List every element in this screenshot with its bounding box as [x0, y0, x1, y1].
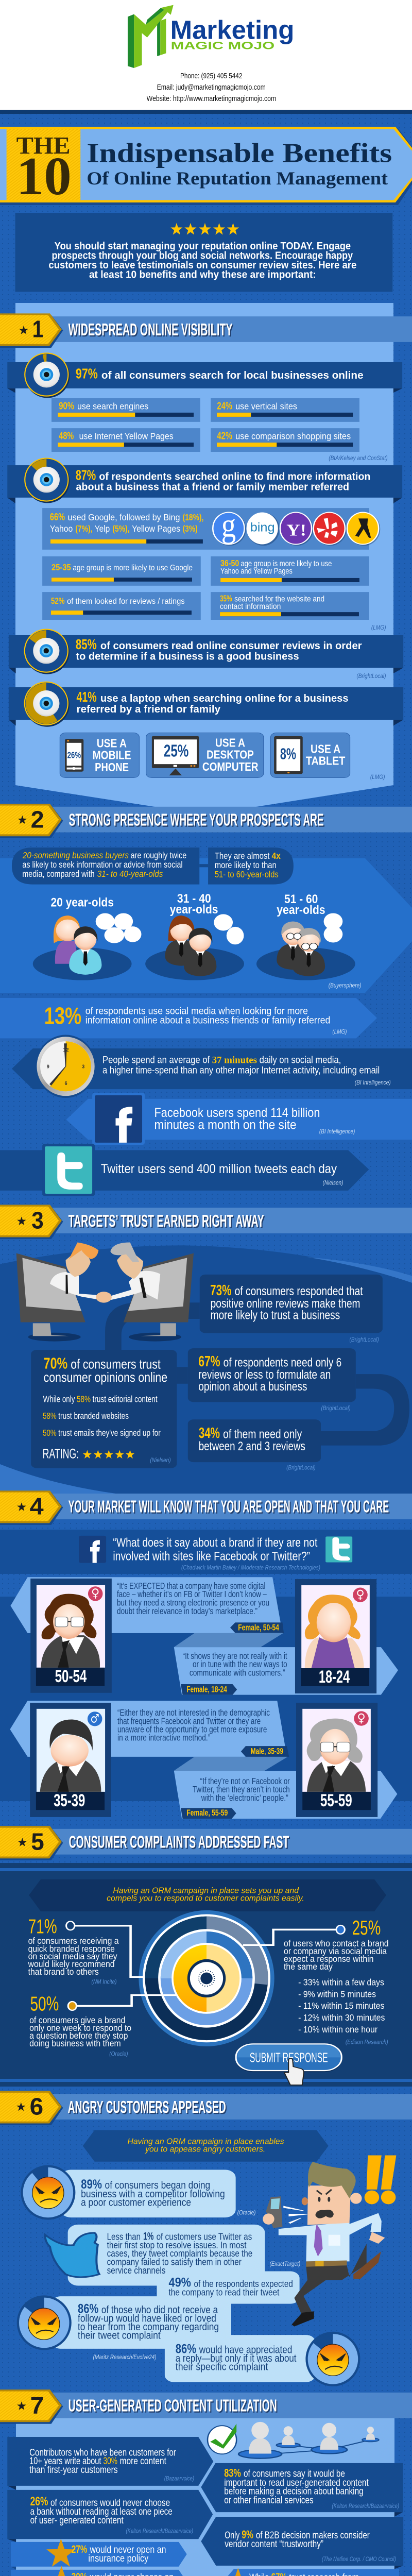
band: 13%: (LMG) — [332, 1028, 347, 1036]
stat: 86% follow-up: (Maritz Research/Evolve24) — [93, 2354, 157, 2361]
device card: mobile phone: MOBILE — [93, 749, 131, 762]
stat box: 70% — [31, 1350, 177, 1468]
stat box: search engines used: (18%), — [183, 513, 203, 522]
ribbon: contributors 30%: than first-year customers — [29, 2464, 118, 2475]
quote: Male, 35-39: Male, 35-39 — [251, 1747, 283, 1756]
stat box: 34%: of them need only — [223, 1427, 302, 1441]
intro hexagon — [29, 1879, 386, 1911]
profile card: 35-39: ♂ — [91, 1712, 99, 1726]
device card: tablet — [271, 733, 350, 778]
section heading 4: 4 — [30, 1493, 44, 1520]
icon: approval check — [208, 2424, 236, 2454]
icon: Twitter bird with stat: (ExactTarget) — [269, 2261, 300, 2267]
callout: 25% — [243, 1916, 389, 2046]
callout: 20-something buyers: 20-something business buyers — [22, 851, 129, 860]
contact details — [147, 71, 276, 103]
section 3: trust — [0, 1242, 412, 1525]
callout: 20-something buyers: 31- to 40-year-olds — [97, 869, 163, 879]
ribbon: 87% — [7, 458, 402, 503]
stat boxes: age groups and behaviour — [42, 556, 369, 620]
speech bubbles background — [53, 2170, 315, 2382]
callout: 50%: 50% — [30, 1992, 59, 2015]
band: 13%: of respondents use social media when looking for more — [85, 1005, 308, 1016]
stat: 49%: 49% — [169, 2275, 191, 2290]
stat box: search engines used: Yelp — [95, 524, 110, 534]
age group labels — [50, 892, 325, 917]
stat boxes: age groups and behaviour: searched for the website and — [234, 595, 324, 604]
stat boxes: age groups and behaviour: age group is more likely to use — [241, 559, 332, 568]
section 6: angry customers — [0, 2156, 412, 2459]
device card: desktop computer: DESKTOP — [207, 748, 254, 761]
stat: 86% reply: would have appreciated — [199, 2344, 292, 2355]
ribbon: 87%: 87% — [76, 467, 96, 483]
profile card: 55-59: 55-59 — [320, 1790, 352, 1810]
stat: 89% — [22, 2166, 255, 2218]
callout: 20-something buyers — [12, 848, 294, 885]
stat: 86% follow-up — [18, 2297, 219, 2361]
section heading 7: 7 — [30, 2392, 44, 2419]
icons: search engine logos: g — [221, 506, 236, 545]
ribbon: 41%: 41% — [76, 689, 97, 705]
stat: 89%: a poor customer experience — [81, 2197, 191, 2208]
title banner — [0, 127, 412, 206]
section heading 4 — [0, 1490, 412, 1525]
stat: 86% reply: their specific complaint — [176, 2361, 268, 2372]
quote: Female, 18-24: Female, 18-24 — [186, 1685, 227, 1694]
callout: 71%: that brand to others — [28, 1967, 99, 1977]
device card: mobile phone: 26% — [67, 750, 81, 760]
section heading 3: 3 — [31, 1207, 44, 1234]
callout: 50%: a question before they stop — [29, 2031, 128, 2041]
ribbon: 26% — [7, 2490, 213, 2542]
band: Twitter — [0, 1144, 369, 1196]
logo: Marketing Magic Mojo — [128, 5, 294, 68]
section heading 5 — [0, 1826, 412, 1860]
quote: Female, 18-24: “It shows they are not really with it — [183, 1651, 287, 1661]
ribbon: 85%: 85% — [76, 636, 97, 652]
contact details: Phone: (925) 405 5442 — [180, 71, 242, 80]
icon: Twitter bird with stat: service channels — [107, 2265, 166, 2276]
band: 37 minutes: People spend an average of — [102, 1054, 210, 1065]
section heading 6: 6 — [30, 2093, 43, 2120]
ribbon: 83%: of consumers say it would be — [244, 2468, 345, 2479]
stat box: 67%: 67% — [198, 1353, 220, 1370]
icon: Twitter bird with stat — [45, 2230, 300, 2277]
stat box: 67% — [188, 1348, 356, 1402]
icon: clock: 3 — [82, 1064, 85, 1070]
stat box: 70%: (Nielsen) — [150, 1457, 171, 1464]
callout: 50%: only one week to respond to — [29, 2023, 131, 2033]
band: 27%: 27% — [72, 2543, 87, 2555]
stat boxes: age groups and behaviour: 52% — [51, 596, 65, 606]
device card: mobile phone: USE A — [97, 737, 127, 750]
ribbon: contributors 30%: Contributors who have been customers for — [29, 2447, 176, 2458]
band: Twitter: (Nielsen) — [323, 1180, 343, 1187]
ribbon: contributors 30% — [7, 2437, 213, 2490]
band: header and title — [0, 5, 412, 292]
stat: 89%: 89% — [81, 2177, 102, 2192]
callout: 20-something buyers: They are almost — [215, 851, 270, 861]
callout: 71%: of consumers receiving a — [28, 1936, 119, 1946]
quote: Female, 50-54: doubt their relevance in today’s marketplace.” — [117, 1606, 258, 1616]
section heading 2 — [0, 804, 412, 838]
callout: 20-something buyers: 4x — [272, 851, 281, 861]
ribbon: 85% — [9, 630, 403, 674]
stat box: 73% — [200, 1275, 383, 1333]
band: 37 minutes: daily on social media, — [260, 1054, 341, 1065]
profile card: 18-24: 18-24 — [319, 1667, 350, 1687]
stat box: 70%: of consumers trust — [71, 1357, 161, 1371]
icon: Twitter bird with stat: cases, they tweet complaints because the — [107, 2248, 252, 2259]
source: (BrightLocal) — [321, 1405, 351, 1412]
ribbon: 26%: a bank without reading at least one piece — [30, 2506, 173, 2517]
stat boxes: age groups and behaviour: of them looked for reviews / ratings — [67, 597, 185, 606]
device card: tablet: USE A — [311, 742, 340, 756]
ribbon: 26%: 26% — [30, 2495, 48, 2508]
quote heading with social icons — [79, 1536, 352, 1571]
age group labels: 20 year-olds — [50, 895, 114, 909]
stat: 49%: of the respondents expected — [194, 2278, 293, 2289]
ribbon: 85%: to determine if a business is a good business — [76, 651, 299, 663]
ribbon: contributors 30%: (Bazaarvoice) — [164, 2475, 194, 2482]
band: 27% — [11, 2542, 187, 2569]
stat box: 70%: trust branded websites — [58, 1411, 129, 1421]
stat box: 67%: opinion about a business — [198, 1380, 307, 1393]
stat: 86% follow-up: follow-up would have liked or loved — [78, 2313, 216, 2324]
device card: mobile phone — [60, 733, 139, 778]
icon: Twitter bird with stat: their first stop to resolve issues. In most — [107, 2240, 247, 2250]
illustration: user network — [238, 2422, 379, 2459]
band: 13%: 13% — [44, 1002, 81, 1029]
source: (LMG) — [370, 774, 385, 781]
stat box: 70%: trust emails they've signed up for — [58, 1428, 161, 1438]
ribbon: 83%: or other financial services — [224, 2495, 314, 2505]
stat box: 34% — [188, 1419, 321, 1462]
quote: Female, 50-54 — [117, 1581, 284, 1633]
callout: 25%: the same day — [284, 1962, 333, 1972]
contact details: Website: http://www.marketingmagicmojo.com — [147, 94, 276, 103]
stat box: search engines used: (3%) — [183, 524, 198, 534]
quote: Female, 50-54: “It’s EXPECTED that a company have some digital — [117, 1581, 265, 1591]
quote ribbons — [10, 1577, 398, 1819]
quote: Female, 55-59: with the ‘electronic’ people.” — [201, 1793, 288, 1803]
stat boxes: age groups and behaviour: 35% — [220, 594, 232, 604]
device card: tablet: 8% — [280, 745, 296, 762]
callout: 20-something buyers: media, compared with — [22, 869, 95, 879]
age group labels: 31 - 40 — [177, 892, 211, 905]
band: Facebook: (BI Intelligence) — [319, 1128, 355, 1135]
quote: Female, 55-59: Female, 55-59 — [186, 1808, 228, 1818]
section 2 continued — [0, 913, 412, 1239]
stat box: 34%: between 2 and 3 reviews — [199, 1439, 305, 1453]
ribbon: 41%: referred by a friend or family — [76, 703, 220, 715]
section heading 3 — [0, 1205, 412, 1239]
band: 27%: would never open an — [90, 2544, 166, 2555]
stat boxes: search usage: 48% — [59, 430, 74, 442]
stat: 86% follow-up: 86% — [78, 2302, 98, 2316]
stat: 49%: the company to read their tweet — [169, 2287, 279, 2298]
section 4: quotes — [0, 1536, 412, 1860]
band: 67% research — [221, 2569, 399, 2576]
quote: Female, 18-24: communicate with customers.” — [190, 1668, 285, 1678]
callout: 20-something buyers: more likely to than — [215, 860, 277, 870]
stat box: search engines used — [42, 508, 369, 550]
quote: Male, 35-39: “Either they are not interested in the demographic — [117, 1708, 270, 1718]
band: Facebook: minutes a month on the site — [154, 1117, 297, 1132]
section 5: complaints — [0, 1879, 412, 2162]
illustration: angry man on phone — [263, 2156, 396, 2327]
ribbon: 97%: 97% — [76, 366, 98, 382]
stat: 49% — [169, 2275, 293, 2298]
stat: 86% reply: 86% — [176, 2342, 196, 2356]
stat boxes: age groups and behaviour: 25-35 — [52, 563, 71, 572]
stat boxes: age groups and behaviour: contact information — [220, 602, 281, 611]
stat box: 70%: 50% — [43, 1428, 57, 1438]
ribbon: 83% — [201, 2463, 403, 2517]
age group labels: year-olds — [277, 903, 325, 917]
intro hexagon: compels you to respond to customer complaints easily. — [107, 1894, 304, 1903]
people group: 20 year-olds — [33, 913, 141, 980]
stat box: search engines used: used Google, followed by Bing — [68, 513, 180, 522]
title banner: 10 — [16, 146, 72, 206]
ribbon: 26%: of user- generated content — [30, 2515, 124, 2526]
icon: clock — [36, 1035, 96, 1098]
profile card: 50-54: ♀ — [91, 1587, 99, 1600]
stat boxes: age groups and behaviour: 36-50 — [220, 558, 239, 568]
quote: Male, 35-39: unaware of the opportunity to get more exposure — [117, 1724, 267, 1735]
profile card: 35-39: 35-39 — [54, 1790, 85, 1810]
callout: 71%: on social media say they — [28, 1952, 117, 1961]
callout: 25%: 25% — [352, 1916, 381, 1939]
profile card: 18-24 — [295, 1579, 376, 1693]
ribbon: 26%: of consumers would never choose — [50, 2497, 170, 2508]
quote: Female, 50-54: face – whether it’s on FB or Twitter I don’t know – — [117, 1589, 267, 1599]
stat: 89%: of consumers began doing — [105, 2179, 210, 2191]
quote: Male, 35-39: that frequents Facebook and Twitter or they are — [117, 1716, 261, 1726]
stat box: search engines used: Yahoo — [50, 524, 73, 534]
button: submit response — [236, 2044, 341, 2085]
section heading 5: 5 — [31, 1828, 44, 1855]
logo: Marketing Magic Mojo: MAGIC MOJO — [171, 40, 274, 52]
quote: Male, 35-39 — [117, 1708, 289, 1757]
stat: 86% reply — [176, 2333, 359, 2385]
logo: Marketing Magic Mojo: Marketing — [170, 15, 294, 44]
source: (LMG) — [371, 624, 386, 632]
ribbon: 9%: vendor content “trustworthy” — [225, 2538, 323, 2549]
section 1: widespread online visibility — [0, 313, 412, 620]
band: 13% — [0, 998, 377, 1038]
band: Facebook — [66, 1093, 412, 1145]
source: (BrightLocal) — [286, 1464, 316, 1471]
section heading 2: 2 — [31, 806, 44, 833]
icon: Twitter bird with stat: Less than — [107, 2231, 141, 2242]
stat: 86% follow-up: to hear from the company regarding — [78, 2321, 219, 2332]
icon: Twitter bird with stat: company failed to satisfy them in other — [107, 2257, 242, 2267]
icons: search engine logos — [213, 506, 380, 546]
stat box: search engines used: (7%), — [75, 524, 93, 534]
people group: 31-40 — [145, 914, 244, 980]
section heading 7 — [0, 2389, 412, 2424]
intro text box — [15, 213, 392, 292]
callout: 20-something buyers: as likely to seek information or advice from social — [22, 860, 183, 870]
stat box: 70%: 58% — [77, 1394, 91, 1404]
stat box: 70%: 70% — [44, 1354, 67, 1372]
section heading 1 — [0, 313, 412, 348]
source: (BrightLocal) — [356, 673, 386, 680]
quote: Female, 50-54: Female, 50-54 — [238, 1623, 279, 1633]
intro hexagon: Having an ORM campaign in place sets you up and — [113, 1886, 299, 1895]
contact details: Email: judy@marketingmagicmojo.com — [157, 83, 266, 91]
ribbon: contributors 30%: 30% — [104, 2455, 117, 2466]
ribbon: contributors 30%: more content — [120, 2455, 166, 2466]
stat box: 70%: trust editorial content — [93, 1394, 158, 1404]
stat: 89%: business with a competitor following — [81, 2188, 225, 2199]
quote: Female, 55-59 — [181, 1776, 290, 1819]
stat: 89%: (Oracle) — [237, 2210, 255, 2216]
section heading 1: 1 — [32, 315, 43, 343]
band: 37 minutes: 37 minutes — [212, 1054, 257, 1065]
stat box: 70%: consumer opinions online — [44, 1370, 167, 1385]
quote: Female, 18-24: or in tune with the new ways to — [193, 1659, 287, 1669]
ribbon: contributors 30%: 10+ years write about — [29, 2455, 101, 2466]
icon: clock: 12 — [63, 1047, 69, 1053]
callout: 20-something buyers: are roughly twice — [131, 851, 186, 860]
age group labels: year-olds — [170, 903, 218, 916]
quote: Male, 35-39: in a more interactive method.” — [117, 1733, 210, 1743]
callout: 71%: 71% — [28, 1915, 57, 1938]
stat boxes: search usage: use comparison shopping sites — [235, 431, 351, 442]
stat box: search engines used: (5%), — [112, 524, 130, 534]
quote heading with social icons: (Chadwick Martin Bailey / iModerate Research Technologies) — [181, 1564, 320, 1571]
profile card: 55-59 — [296, 1703, 377, 1817]
ribbon: 9%: Only — [225, 2530, 240, 2540]
source: (Buyersphere) — [329, 982, 362, 989]
stat box: 34%: 34% — [199, 1425, 220, 1442]
callout: 50% — [29, 1992, 176, 2058]
icon: Twitter bird with stat: 1% — [143, 2230, 153, 2242]
stat boxes: age groups and behaviour: Yahoo and Yellow Pages — [220, 567, 293, 576]
quote: Female, 50-54: but they need a strong electronic presence or you — [117, 1598, 269, 1608]
stat box: 70%: RATING: — [43, 1446, 79, 1461]
quote: Female, 55-59: “If they’re not on Facebook or — [200, 1776, 290, 1786]
source: (BrightLocal) — [350, 1336, 379, 1343]
band: 37 minutes: (BI Intelligence) — [355, 1079, 391, 1086]
device card: desktop computer — [146, 733, 264, 778]
stat box: search engines used: 66% — [50, 511, 65, 522]
ribbon: 9%: 9% — [242, 2528, 253, 2541]
ribbon: 26%: (Kelton Research/Bazaarvoice) — [126, 2528, 193, 2535]
illustration: handshake through monitors — [16, 1242, 194, 1342]
callout: 50%: of consumers give a brand — [29, 2015, 125, 2025]
intro text box: at least 10 benefits and why these are important: — [89, 269, 316, 281]
callout: 71% — [28, 1915, 143, 1986]
profile card: 18-24: ♀ — [356, 1588, 365, 1601]
callout: 20-something buyers: 51- to 60-year-olds — [215, 870, 279, 879]
section background shape — [0, 1245, 412, 1494]
ribbon: 83%: 83% — [224, 2466, 241, 2480]
icon: clock: 9 — [47, 1064, 49, 1070]
device card: desktop computer: USE A — [215, 736, 245, 750]
stat boxes: search usage: 90% — [59, 400, 74, 412]
stat box: 70%: 58% — [43, 1411, 57, 1421]
title banner: THE — [16, 132, 71, 159]
band: 30% — [11, 2570, 187, 2576]
profile card: 35-39 — [30, 1703, 111, 1817]
callout: 71%: (NM Incite) — [92, 1978, 117, 1986]
intro hexagon: Having an ORM campaign in place enables — [127, 2137, 284, 2146]
callout: 50%: doing business with them — [29, 2039, 121, 2048]
icons: search engine logos: bing — [250, 520, 275, 534]
intro hexagon: you to appease angry customers. — [144, 2145, 265, 2154]
icons: search engine logos: Y! — [286, 521, 306, 539]
stat box: 70%: While only — [43, 1394, 75, 1404]
intro hexagon — [83, 2130, 329, 2162]
stat: 86% follow-up: their tweet complaint — [78, 2330, 161, 2341]
stat boxes: age groups and behaviour: age group is more likely to use Google — [73, 563, 193, 572]
quote: Female, 55-59: Twitter, then they aren’t in touch — [193, 1785, 290, 1794]
quote: Female, 18-24 — [181, 1651, 287, 1695]
stat: 86% follow-up: of those who did not receive a — [101, 2304, 218, 2315]
icon: Twitter bird with stat: of customers use Twitter as — [157, 2231, 252, 2242]
ribbon: 41% — [9, 682, 403, 727]
stat box: 73%: 73% — [210, 1282, 231, 1299]
profile card: 50-54 — [30, 1579, 112, 1693]
callout: 50%: (Oracle) — [109, 2051, 128, 2058]
stat: 86% reply: a reply—but only if it was about — [176, 2352, 297, 2364]
people group: 51-60 — [256, 913, 355, 980]
callout: 71%: would likely recommend — [28, 1959, 114, 1969]
device card: mobile phone: PHONE — [95, 761, 129, 774]
profile card: 50-54: 50-54 — [55, 1666, 87, 1686]
icon: clock: 6 — [65, 1081, 67, 1087]
stat boxes: search usage: use vertical sites — [235, 401, 297, 412]
profile card: 55-59: ♀ — [357, 1711, 366, 1725]
device card: desktop computer: COMPUTER — [202, 760, 259, 773]
age group labels: 51 - 60 — [284, 892, 318, 906]
section 7: user-generated content — [0, 2437, 412, 2576]
device card: desktop computer: 25% — [164, 742, 188, 760]
target ring chart — [139, 1910, 274, 2046]
section 1 continued and section 2 heading — [0, 624, 412, 917]
connector lines — [105, 1302, 409, 1446]
stat boxes: search usage: use Internet Yellow Pages — [79, 431, 174, 442]
stat boxes: search usage: 42% — [217, 430, 232, 442]
band: 27%: insurance policy — [88, 2553, 149, 2564]
callout: 25%: - 9% within 5 minutes — [298, 1989, 376, 1999]
callout: 25%: - 10% within one hour — [298, 2025, 377, 2035]
callout: 71%: quick branded response — [28, 1944, 115, 1954]
stat boxes: search usage — [52, 398, 359, 452]
stat boxes: search usage: 24% — [217, 400, 232, 412]
ribbon: 97% — [7, 353, 402, 398]
section heading 6 — [0, 2091, 412, 2125]
band: 37 minutes — [12, 1048, 412, 1089]
stat boxes: search usage: use search engines — [77, 401, 148, 412]
stat box: search engines used: Yellow Pages — [132, 524, 180, 534]
device card: tablet: TABLET — [306, 754, 346, 768]
ribbon: 9% — [201, 2517, 403, 2569]
band: Facebook: Facebook users spend 114 billion — [154, 1106, 320, 1120]
